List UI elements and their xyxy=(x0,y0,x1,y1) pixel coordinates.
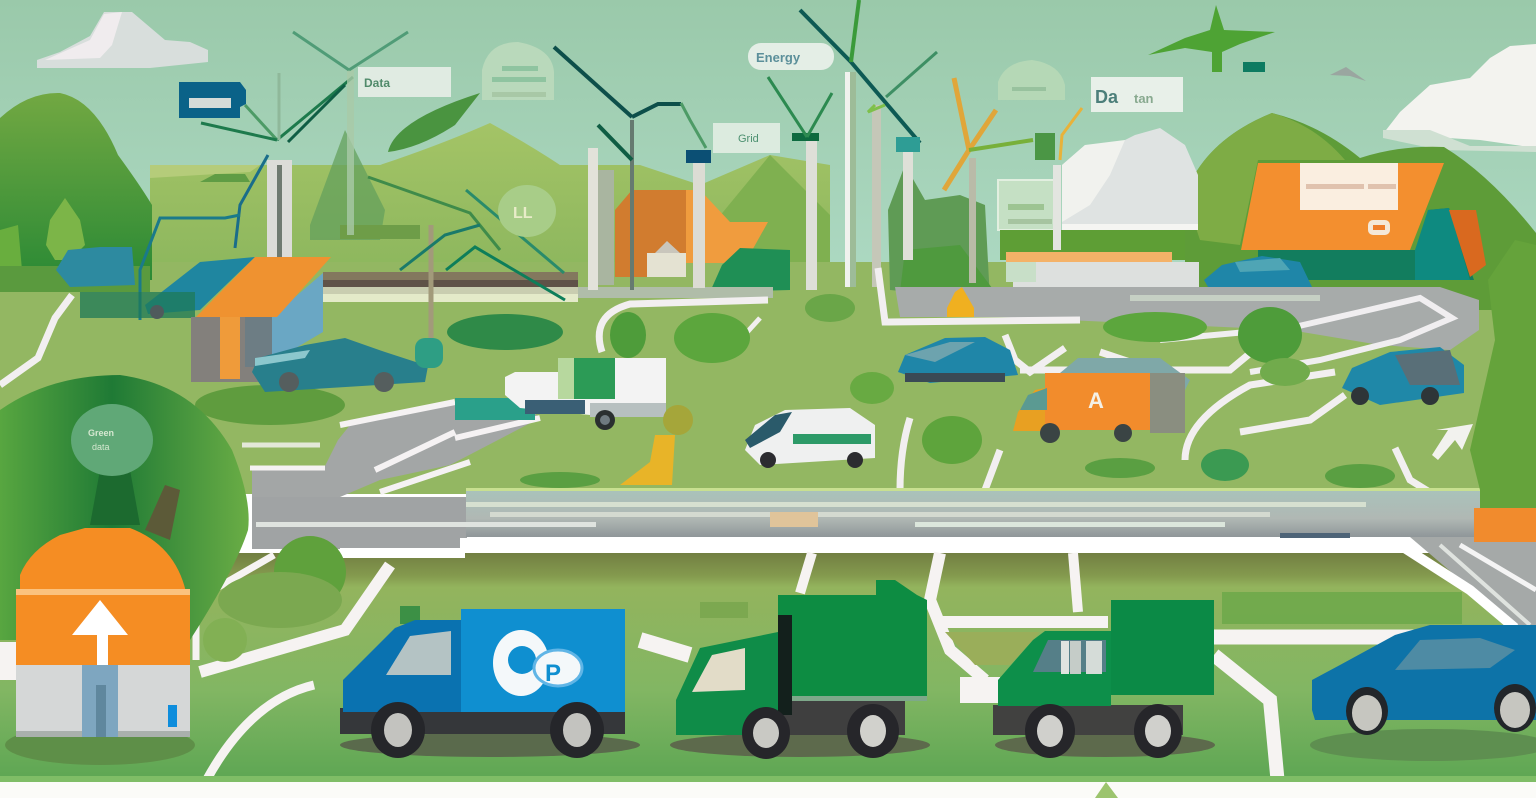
icon: green plane leaf xyxy=(1148,5,1275,72)
big tree bottom left xyxy=(0,375,249,640)
hills and trees: top right xyxy=(1185,113,1536,310)
label: top left data tag xyxy=(358,67,451,97)
wind turbine 2 xyxy=(293,32,408,235)
teal car xyxy=(252,338,443,392)
wind turbine 8: orange xyxy=(944,78,1033,283)
label: pale dome callout left xyxy=(482,42,554,100)
yellow figure xyxy=(620,405,693,485)
blue car foreground xyxy=(1310,625,1536,761)
vegetation under turbines xyxy=(310,130,1185,300)
blue car: behind warehouse xyxy=(1204,256,1312,287)
label: data tag right: Da xyxy=(1095,87,1119,107)
label: circle icon over hill xyxy=(498,185,556,237)
cloud: centre right xyxy=(1062,128,1198,230)
white paths lower xyxy=(0,553,1425,785)
wind turbine 6 xyxy=(768,77,832,290)
teal warehouse xyxy=(1258,208,1486,280)
distant hills xyxy=(150,123,830,300)
orange-roof shed xyxy=(191,257,331,382)
grass shadow under orange building xyxy=(5,725,195,765)
cloud: top left xyxy=(37,12,208,68)
midground grass xyxy=(0,262,1536,494)
green small truck xyxy=(993,600,1215,758)
green large truck xyxy=(670,580,930,759)
wind turbine 1 xyxy=(201,73,353,257)
bushes lower xyxy=(203,536,1462,665)
label: grid tag: Grid xyxy=(738,133,759,145)
white car mid xyxy=(745,408,875,468)
white arrow right xyxy=(1432,424,1473,460)
orange cone xyxy=(947,287,974,317)
label panel: pale board xyxy=(998,180,1058,230)
orange van mid: A xyxy=(1088,388,1104,413)
lower grass xyxy=(0,553,1536,781)
orange planter right xyxy=(1474,508,1536,542)
low warehouse xyxy=(1006,252,1199,287)
white van mid xyxy=(505,358,666,430)
teal cars top left xyxy=(56,247,255,319)
white paths midground xyxy=(0,268,1478,522)
big tree bottom left: data xyxy=(92,442,110,452)
label: energy pill: Energy xyxy=(756,50,801,65)
wind turbine 7 xyxy=(868,105,920,287)
label: data tag right xyxy=(1091,77,1183,112)
leaf: large xyxy=(388,93,480,152)
wind turbine 9 xyxy=(1035,108,1082,250)
tree: top left xyxy=(0,93,152,292)
blue car right xyxy=(1342,347,1464,405)
teal cranes xyxy=(140,177,565,340)
label: top left data tag: Data xyxy=(364,76,390,90)
orange billboard building xyxy=(1241,163,1444,250)
orange dome building xyxy=(16,528,190,737)
big tree bottom left: Green xyxy=(88,428,114,438)
white kerb and exit ramp xyxy=(340,537,1536,640)
white bottom strip xyxy=(0,776,1536,798)
blue box truck xyxy=(340,609,640,758)
bird xyxy=(1330,67,1366,81)
label: dark blue sign xyxy=(179,82,246,118)
orange dome in valley xyxy=(615,190,768,277)
label: pale dome right xyxy=(998,60,1065,100)
main highway xyxy=(252,488,1480,549)
cloud: top right xyxy=(1383,44,1536,152)
orange van mid xyxy=(1013,358,1190,443)
label: circle icon over hill: LL xyxy=(513,205,533,222)
bushes midground xyxy=(195,294,1395,488)
label: grid tag xyxy=(713,123,780,153)
blue car mid xyxy=(898,337,1018,383)
green mini truck in valley xyxy=(710,248,790,292)
blue box truck: P xyxy=(545,660,561,687)
road behind turbines xyxy=(323,272,773,302)
wind turbine 5: tallest xyxy=(800,0,937,287)
wind turbine 4 xyxy=(681,103,711,288)
grey branching road mid left xyxy=(242,398,540,497)
right tall plant xyxy=(1470,240,1536,510)
sky background xyxy=(0,0,1536,300)
label: energy pill xyxy=(748,43,834,70)
label: data tag right: tan xyxy=(1134,91,1154,106)
wind turbine 3 xyxy=(554,47,681,290)
grey curving road right xyxy=(895,287,1479,372)
